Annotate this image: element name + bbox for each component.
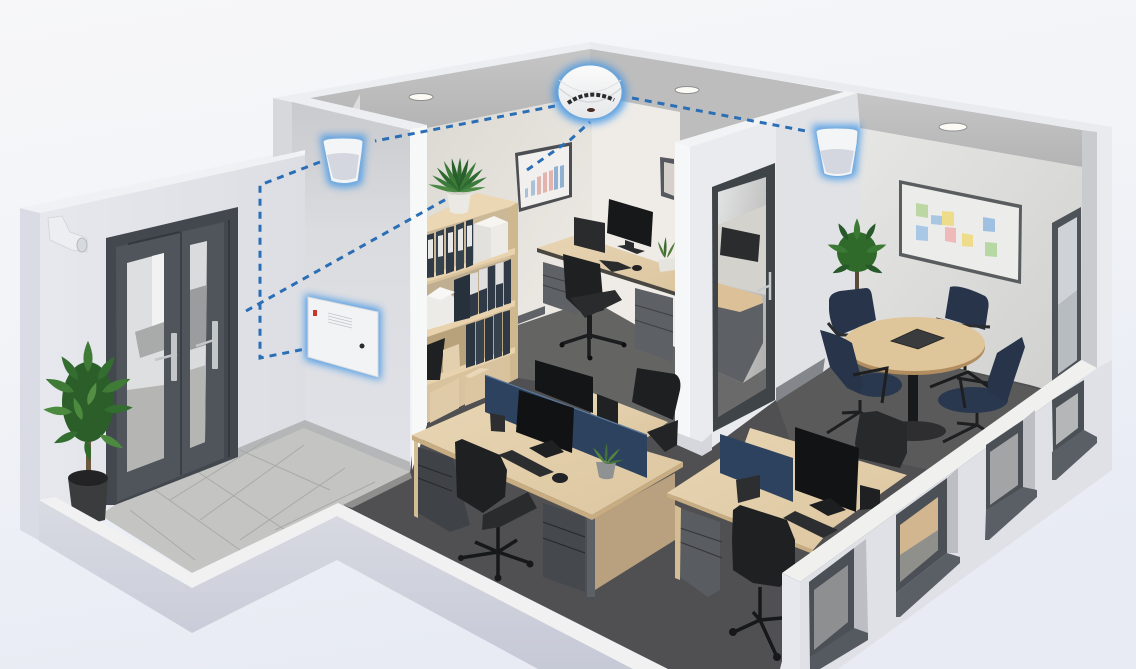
carpet floor <box>343 290 1090 669</box>
icon: motion sensor right <box>812 125 861 180</box>
window 4 <box>1052 380 1097 480</box>
panel: front workstation desk <box>412 360 683 597</box>
keyboard <box>599 260 632 272</box>
tablet on table <box>891 329 944 349</box>
glass door in divider <box>712 163 775 432</box>
meeting chair front right <box>938 337 1025 442</box>
alarm wiring: dashed blue lines <box>246 98 806 358</box>
panel: low front walls <box>39 497 667 669</box>
window 1 <box>809 539 868 669</box>
potted plant: entry <box>43 341 133 524</box>
panel: left office back wall <box>427 95 680 350</box>
panel: office divider wall <box>675 92 860 456</box>
panel: entry wall with door <box>20 151 305 541</box>
plant on bookshelf <box>428 158 487 214</box>
storage boxes top shelf <box>474 216 508 264</box>
small framed picture <box>660 157 674 200</box>
main monitor <box>516 390 574 458</box>
panel: right workstation desk <box>667 427 907 661</box>
icon: motion sensor left <box>320 135 366 188</box>
chair at desk <box>455 439 537 582</box>
small back laptop <box>597 394 618 424</box>
left pedestal <box>418 447 470 532</box>
door handles <box>155 321 218 381</box>
pen holder <box>490 413 505 432</box>
panel: meeting room back wall <box>857 93 1082 400</box>
binders mid shelf <box>427 259 511 330</box>
desk end panel <box>595 473 675 590</box>
office chair: back room <box>560 254 626 360</box>
downlight <box>409 94 433 100</box>
right pedestal <box>543 503 585 592</box>
dark chair near table <box>855 411 907 468</box>
panel: security panel wall <box>238 42 1112 472</box>
left door glass <box>127 253 164 472</box>
laptop <box>574 217 605 253</box>
cardboard boxes bottom shelf <box>430 367 489 423</box>
back office desk <box>537 199 676 362</box>
window 2 <box>896 468 960 617</box>
laptop <box>860 485 880 510</box>
blue partition <box>720 434 793 502</box>
icon: ceiling smoke detector <box>553 62 627 124</box>
back monitor <box>535 360 593 413</box>
plant: meeting room <box>827 218 887 292</box>
small desk plant <box>656 237 676 272</box>
tiled entry floor <box>100 428 412 573</box>
desk succulent <box>592 443 624 479</box>
camera sensor on wall <box>48 216 87 252</box>
framed bar chart picture <box>515 142 572 212</box>
mouse <box>632 265 642 271</box>
pen holder <box>736 475 760 503</box>
bookshelf <box>427 193 518 423</box>
meeting chair front left <box>820 330 902 433</box>
door handle <box>757 272 771 300</box>
round meeting table <box>843 317 985 441</box>
keyboard <box>498 450 554 477</box>
blue partition <box>485 375 647 478</box>
monitor <box>607 199 653 254</box>
panel: right exterior wall <box>782 127 1112 669</box>
window 3 <box>985 410 1037 540</box>
keyboard <box>783 511 838 538</box>
meeting chair back right <box>930 286 990 388</box>
mouse <box>552 473 568 483</box>
downlight <box>939 123 967 131</box>
binders top shelf <box>427 219 473 278</box>
desk top <box>412 403 683 515</box>
panel: meeting room side window <box>1052 207 1081 387</box>
icon: alarm control panel <box>305 294 381 380</box>
double entry doors <box>106 207 238 505</box>
monitor <box>795 427 859 516</box>
downlight <box>675 86 699 94</box>
right door glass <box>190 241 207 448</box>
binders lower shelf <box>427 310 510 380</box>
meeting chair back left <box>828 288 876 336</box>
whiteboard with sticky notes <box>899 180 1022 284</box>
chair <box>729 505 795 661</box>
ceiling soffit: left office <box>292 48 845 142</box>
far office chair <box>632 368 680 452</box>
far desk <box>590 393 668 437</box>
